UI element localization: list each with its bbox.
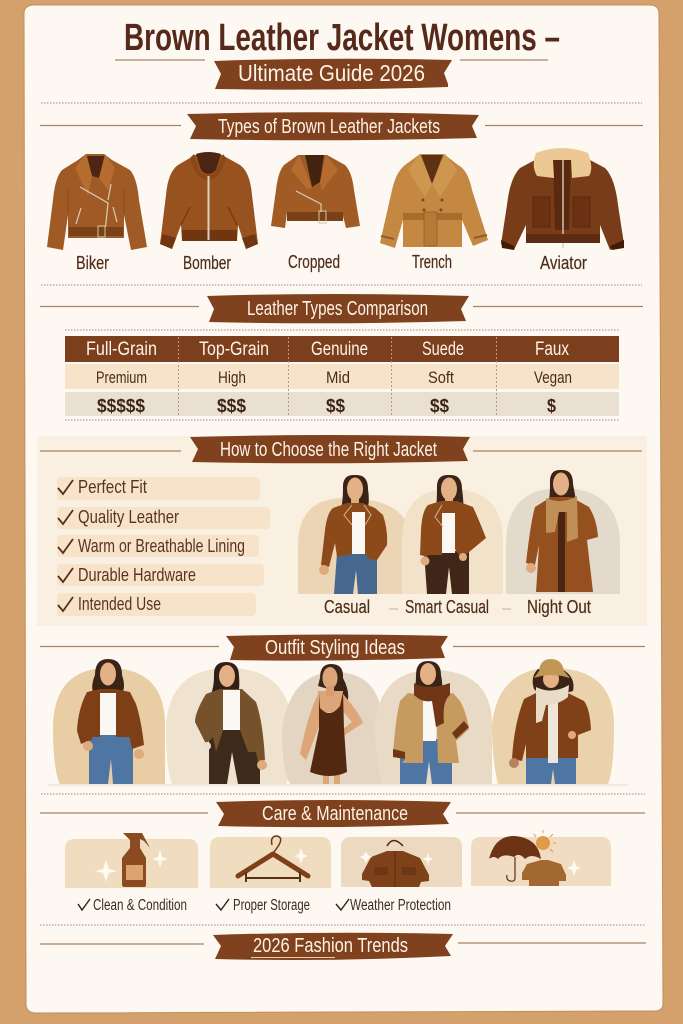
table header (86, 339, 569, 360)
table header: Suede (422, 339, 464, 360)
figure: smart casual (402, 475, 503, 594)
outfit 2 (166, 662, 292, 784)
jacket: biker (47, 154, 147, 250)
checklist: Quality Leather (78, 507, 179, 527)
comparison table (65, 330, 619, 420)
section heading: care: Care & Maintenance (262, 803, 408, 825)
jacket: bomber (160, 152, 258, 249)
table row: grade: Vegan (534, 368, 572, 387)
table row: grade: Premium (96, 368, 147, 387)
section heading: care (40, 800, 645, 827)
checklist: Warm or Breathable Lining (78, 536, 245, 556)
tile: weather (471, 830, 611, 886)
section heading: types: Types of Brown Leather Jackets (218, 116, 440, 138)
jacket: aviator (501, 148, 624, 250)
table row: grade: High (218, 368, 246, 387)
section heading: leather types: Leather Types Comparison (247, 298, 428, 320)
section heading: types (40, 112, 643, 140)
table header: Top-Grain (199, 339, 269, 360)
care labels: Clean & Condition (93, 897, 187, 914)
table header: Genuine (311, 339, 368, 360)
table row: price: $$ (326, 396, 345, 416)
section heading: outfit: Outfit Styling Ideas (265, 637, 405, 659)
label: Casual: Casual (324, 597, 370, 617)
table header: Faux (535, 339, 569, 360)
section heading: leather types (40, 294, 643, 323)
table row: price: $$$ (217, 396, 246, 416)
outfit 5 (492, 659, 614, 784)
table row: price: $$$$$ (97, 396, 145, 416)
tile: spray bottle (65, 833, 198, 888)
table row: price (97, 396, 556, 416)
label: Night Out: Night Out (527, 597, 591, 617)
table row: grade: Mid (326, 368, 350, 387)
jacket: cropped (271, 155, 360, 228)
label: Aviator: Aviator (540, 253, 587, 273)
section heading: trends: 2026 Fashion Trends (253, 935, 408, 957)
table row: price: $ (547, 396, 556, 416)
section heading: trends (40, 933, 646, 960)
label: Smart Casual: Smart Casual (405, 597, 489, 617)
care labels: Proper Storage (233, 897, 310, 914)
figure: casual (298, 475, 412, 594)
checklist (57, 477, 270, 616)
care labels (78, 897, 451, 914)
table row: price: $$ (430, 396, 449, 416)
outfit 3 (282, 664, 383, 784)
subtitle ribbon: Ultimate Guide 2026 (238, 60, 425, 86)
checklist: Durable Hardware (78, 565, 196, 585)
care labels: Weather Protection (350, 897, 451, 914)
panel: care tiles (65, 830, 611, 914)
panel: outfit ideas (48, 659, 628, 785)
checklist: Intended Use (78, 594, 161, 614)
label: Biker: Biker (76, 253, 109, 273)
table row: grade (96, 368, 572, 387)
subtitle ribbon (115, 59, 548, 90)
outfit 1 (53, 659, 165, 784)
tile: jacket (341, 837, 462, 887)
table row: grade: Soft (428, 368, 454, 387)
section heading: choose: How to Choose the Right Jacket (220, 439, 437, 461)
label: Bomber: Bomber (183, 253, 231, 273)
outfit 4 (375, 661, 492, 784)
panel: jacket types (47, 148, 624, 273)
label: Cropped: Cropped (288, 252, 340, 272)
section heading: choose (40, 435, 642, 463)
checklist: Perfect Fit (78, 477, 147, 497)
label: Trench: Trench (412, 252, 452, 272)
table header: Full-Grain (86, 339, 157, 360)
figure: night out (506, 470, 620, 594)
tile: hanger (210, 836, 331, 888)
jacket: trench (380, 154, 488, 248)
panel: how to choose (37, 435, 647, 626)
section heading: outfit (40, 634, 645, 661)
